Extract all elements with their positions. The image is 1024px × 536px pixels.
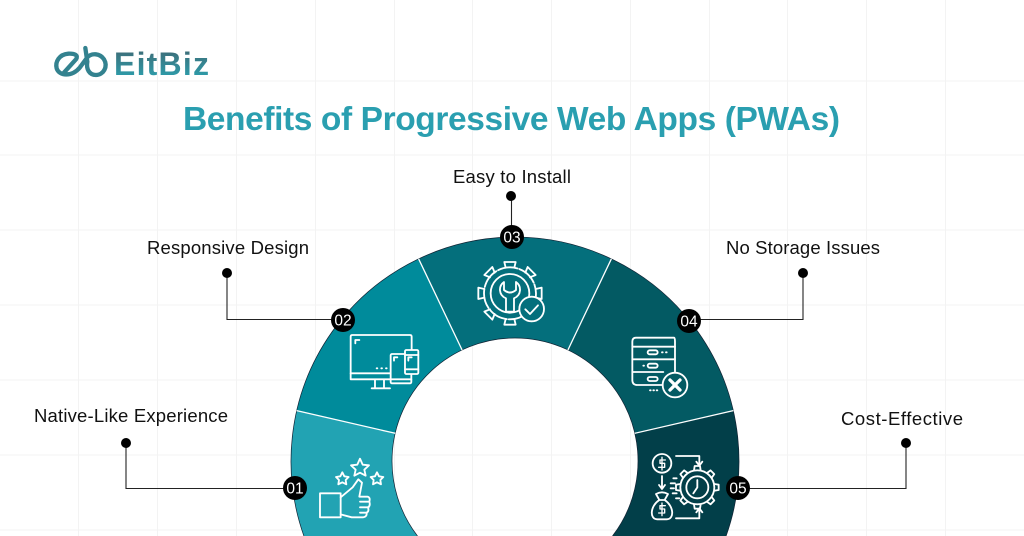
badge: 03 bbox=[503, 230, 521, 246]
segment 02 bbox=[297, 259, 462, 433]
segment 04 bbox=[568, 259, 733, 433]
logo wordmark: EitBiz bbox=[114, 46, 209, 82]
badge bbox=[331, 308, 355, 332]
icon: gear with wrench and check bbox=[478, 262, 544, 325]
connector bbox=[126, 443, 285, 488]
connector bbox=[227, 273, 333, 320]
label: No Storage Issues bbox=[726, 237, 880, 258]
badge: 05 bbox=[729, 480, 747, 498]
label: Easy to Install bbox=[453, 166, 571, 187]
label: Responsive Design bbox=[147, 237, 309, 258]
callout 05: Cost-Effective bbox=[726, 408, 963, 500]
badge: 04 bbox=[680, 314, 698, 330]
icon: responsive devices bbox=[351, 335, 418, 388]
badge bbox=[677, 309, 701, 333]
logo mark bbox=[56, 48, 106, 75]
logo: EitBiz bbox=[56, 46, 209, 82]
connector bbox=[698, 273, 803, 320]
callout 01: Native-Like Experience bbox=[34, 405, 307, 500]
icon: thumbs up with stars bbox=[320, 459, 383, 517]
icon: money and time bbox=[652, 454, 719, 519]
label: Native-Like Experience bbox=[34, 405, 228, 426]
badge: 02 bbox=[334, 312, 352, 330]
callout 02: Responsive Design bbox=[147, 237, 355, 332]
connector bbox=[510, 196, 512, 228]
callout 03: Easy to Install bbox=[453, 166, 571, 249]
callout 04: No Storage Issues bbox=[677, 237, 880, 333]
label: Cost-Effective bbox=[841, 408, 963, 429]
segment 05 bbox=[612, 411, 739, 536]
segment 01 bbox=[291, 411, 418, 536]
badge bbox=[726, 476, 750, 500]
icon: server with x bbox=[632, 338, 687, 397]
connector bbox=[748, 443, 906, 488]
title: Benefits of Progressive Web Apps (PWAs) bbox=[183, 101, 840, 138]
badge: 01 bbox=[286, 480, 304, 498]
ring diagram bbox=[291, 237, 739, 536]
segment 03 bbox=[419, 237, 611, 350]
badge bbox=[283, 476, 307, 500]
